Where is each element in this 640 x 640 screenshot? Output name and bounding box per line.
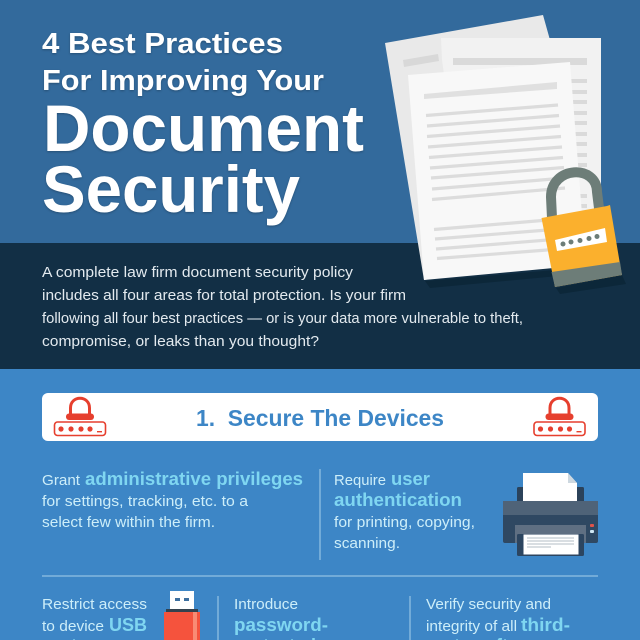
icon: password lock left [54, 398, 106, 436]
title: 4 Best Practices [42, 28, 283, 60]
icon: printer [503, 473, 598, 556]
icon: password lock right [534, 398, 585, 436]
text block: administrative privileges: for settings, tracking, etc. to a [42, 493, 249, 510]
text block: third-party: third- [521, 615, 570, 635]
text block: password-protected: Introduce [234, 596, 298, 613]
back document [385, 15, 601, 280]
text block: user authentication [334, 469, 475, 552]
section background [0, 369, 640, 640]
icon: padlock [542, 172, 626, 294]
intro text: A complete law firm document security policy [42, 264, 354, 281]
text block: third-party: integrity of all [426, 618, 517, 635]
text block: user authentication: Require [334, 472, 386, 489]
divider [218, 596, 219, 640]
header background [0, 0, 640, 244]
text block: administrative privileges: select few within the firm. [42, 514, 215, 531]
intro text: includes all four areas for total protection. Is your firm [42, 287, 406, 304]
text block: password-protected: password- [234, 615, 328, 635]
text block: USB: to device [42, 618, 104, 635]
text block: USB [42, 596, 147, 640]
illustration: stacked documents [385, 15, 601, 288]
text block: user authentication: user [391, 469, 430, 489]
heading: 1. Secure The Devices [196, 405, 444, 431]
text block: third-party: Verify security and [426, 596, 551, 613]
divider [320, 469, 321, 560]
intro text [42, 264, 523, 350]
text block: administrative privileges: administrative privileges [85, 469, 303, 489]
panel: section heading card [42, 393, 598, 441]
icon: USB drive [164, 591, 200, 640]
title: Security [42, 152, 300, 226]
text block: user authentication: authentication [334, 490, 462, 510]
divider [42, 576, 598, 577]
text block: user authentication: scanning. [334, 535, 400, 552]
text block: USB: Restrict access [42, 596, 147, 613]
intro text: compromise, or leaks than you thought? [42, 333, 319, 350]
front document [408, 62, 586, 288]
text block: administrative privileges [42, 469, 303, 531]
text block: password-protected [234, 596, 328, 640]
middle document [441, 38, 601, 262]
title: For Improving Your [42, 65, 324, 97]
intro band background [0, 243, 640, 369]
text block: user authentication: for printing, copying, [334, 514, 475, 531]
title [42, 28, 364, 226]
text block: third-party [426, 596, 570, 640]
intro text: following all four best practices — or is your data more vulnerable to theft, [42, 310, 523, 327]
text block: USB: USB [109, 615, 147, 635]
title: Document [43, 91, 364, 165]
text block: administrative privileges: Grant [42, 472, 81, 489]
divider [410, 596, 411, 640]
